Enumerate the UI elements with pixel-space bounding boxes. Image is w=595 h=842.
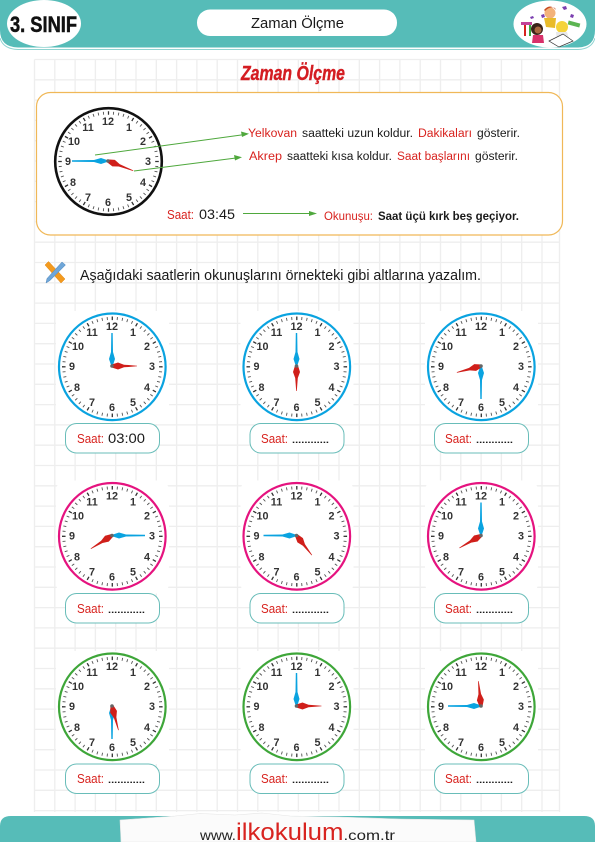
clock 4: 08:15: 10: [72, 510, 84, 522]
clock 5: 04:45: 12: [290, 490, 303, 502]
badge: children illustration: [514, 0, 586, 48]
clock 4: 08:15: 3: [149, 531, 155, 543]
clock 3: 08:30: 5: [499, 397, 505, 409]
text: example time: Saat:: [167, 208, 194, 222]
clock 4: 08:15: 2: [144, 510, 150, 522]
clock 2: 06:00: 7: [273, 397, 280, 409]
label: clock 3 time: ............: [476, 435, 513, 445]
clock 1: 03:00: 9: [69, 361, 75, 373]
clock 6: 08:00: 12: [475, 490, 487, 502]
example clock: 12: [102, 116, 114, 128]
clock 8: 03:00: 4: [328, 722, 335, 734]
clock 9: 11:45: 3: [518, 701, 524, 713]
label: clock 5 time: [250, 594, 344, 623]
example clock: 9: [65, 156, 71, 168]
clock 8: 03:00: [240, 651, 354, 764]
clock 8: 03:00: 9: [253, 701, 260, 713]
clock 7: 05:30: 11: [86, 667, 98, 679]
clock 7: 05:30: 12: [106, 661, 118, 673]
clock 4: 08:15: [56, 480, 169, 594]
label: clock 8 time: Saat:: [261, 772, 288, 786]
clock 3: 08:30: 12: [475, 321, 487, 333]
example clock: 10: [68, 136, 80, 148]
clock 5: 04:45: 5: [314, 566, 321, 578]
clock 6: 08:00: 5: [499, 566, 505, 578]
text: minute hand explanation: saatteki uzun koldur.: [302, 128, 413, 140]
clock 1: 03:00: 3: [149, 361, 155, 373]
label: clock 7 time: ............: [108, 775, 145, 785]
clock 4: 08:15: 7: [89, 566, 95, 578]
grid paper background: [34, 60, 560, 812]
label: clock 5 time: Saat:: [261, 602, 288, 616]
header band: [0, 0, 595, 50]
clock 2: 06:00: 3: [333, 361, 340, 373]
clock 9: 11:45: 2: [513, 681, 519, 693]
clock 9: 11:45: 7: [458, 737, 464, 749]
instruction text: Aşağıdaki saatlerin okunuşlarını örnekteki gibi altlarına yazalım.: [80, 268, 481, 284]
clock 6: 08:00: 4: [513, 552, 519, 564]
label: clock 4 time: ............: [108, 605, 145, 615]
label: clock 1 time: Saat:: [77, 432, 104, 446]
clock 7: 05:30: [56, 651, 169, 764]
label: clock 9 time: Saat:: [445, 772, 472, 786]
clock 5: 04:45: 9: [253, 531, 260, 543]
clock 2: 06:00: [240, 311, 354, 424]
clock 8: 03:00: 6: [293, 742, 300, 754]
text: example reading: Saat üçü kırk beş geçiyor.: [378, 209, 519, 223]
label: clock 6 time: ............: [476, 605, 513, 615]
clock 7: 05:30: 9: [69, 701, 75, 713]
clock 3: 08:30: 4: [513, 382, 519, 394]
clock 5: 04:45: 4: [328, 552, 335, 564]
clock 8: 03:00: 7: [273, 737, 280, 749]
badge: grade: [7, 0, 81, 47]
label: clock 3 time: Saat:: [445, 432, 472, 446]
clock 2: 06:00: 11: [271, 327, 282, 339]
clock 1: 03:00: 7: [89, 397, 95, 409]
label: clock 2 time: ............: [292, 435, 329, 445]
clock 9: 11:45: 1: [499, 667, 505, 679]
clock 6: 08:00: 2: [513, 510, 519, 522]
clock 9: 11:45: 11: [455, 667, 467, 679]
clock 3: 08:30: 10: [441, 341, 453, 353]
clock 2: 06:00: 6: [293, 402, 300, 414]
text: minute hand explanation: Yelkovan: [248, 128, 297, 140]
clock 2: 06:00: 1: [314, 327, 321, 339]
clock 2: 06:00: 2: [328, 341, 335, 353]
clock 9: 11:45: 10: [441, 681, 453, 693]
clock 8: 03:00: 5: [314, 737, 321, 749]
clock 1: 03:00: 1: [130, 327, 136, 339]
clock 3: 08:30: 11: [455, 327, 467, 339]
text: hour hand explanation: gösterir.: [475, 151, 518, 163]
clock 3: 08:30: 1: [499, 327, 505, 339]
header title pill: Zaman Ölçme: [251, 14, 344, 32]
clock 8: 03:00: 2: [328, 681, 335, 693]
clock 3: 08:30: 7: [458, 397, 464, 409]
clock 6: 08:00: 9: [438, 531, 444, 543]
clock 3: 08:30: 2: [513, 341, 519, 353]
label: clock 7 time: [66, 764, 160, 794]
panel: example explanation: [36, 92, 562, 235]
label: clock 9 time: ............: [476, 775, 513, 785]
clock 5: 04:45: 3: [333, 531, 340, 543]
example clock: 8: [70, 177, 76, 189]
clock 6: 08:00: 1: [499, 496, 505, 508]
torn paper: [120, 813, 476, 842]
clock 4: 08:15: 8: [74, 552, 80, 564]
clock 2: 06:00: 12: [290, 321, 303, 333]
arrow: to hour hand label: [134, 155, 242, 171]
clock 1: 03:00: 11: [86, 327, 98, 339]
example clock: 3: [145, 156, 151, 168]
clock 5: 04:45: 10: [256, 510, 269, 522]
clock 3: 08:30: 8: [443, 382, 449, 394]
clock 2: 06:00: 4: [328, 382, 335, 394]
clock 5: 04:45: 8: [258, 552, 265, 564]
clock 1: 03:00: 10: [72, 341, 84, 353]
clock 8: 03:00: 3: [333, 701, 340, 713]
example clock: 5: [126, 192, 132, 204]
clock 5: 04:45: 7: [273, 566, 280, 578]
clock 6: 08:00: 6: [478, 572, 484, 584]
clock 4: 08:15: 5: [130, 566, 136, 578]
clock 7: 05:30: 7: [89, 737, 95, 749]
clock 7: 05:30: 10: [72, 681, 84, 693]
clock 5: 04:45: [240, 480, 354, 594]
clock 3: 08:30: 3: [518, 361, 524, 373]
label: clock 6 time: [434, 594, 528, 623]
clock 1: 03:00: [56, 311, 169, 424]
clock 4: 08:15: 12: [106, 490, 118, 502]
clock 4: 08:15: 11: [86, 496, 98, 508]
example clock: 11: [82, 122, 94, 134]
label: clock 3 time: [434, 424, 528, 453]
text: minute hand explanation: Dakikaları: [418, 128, 472, 140]
text: hour hand explanation: Saat başlarını: [397, 151, 470, 163]
example clock: 6: [105, 197, 111, 209]
clock 7: 05:30: 8: [74, 722, 80, 734]
clock 5: 04:45: 11: [271, 496, 282, 508]
clock 7: 05:30: 2: [144, 681, 150, 693]
clock 7: 05:30: 3: [149, 701, 155, 713]
text: hour hand explanation: saatteki kısa koldur.: [287, 151, 392, 163]
clock 6: 08:00: 10: [441, 510, 453, 522]
clock 3: 08:30: [425, 311, 538, 424]
label: clock 6 time: Saat:: [445, 602, 472, 616]
clock 1: 03:00: 2: [144, 341, 150, 353]
clock 2: 06:00: 9: [253, 361, 260, 373]
clock 7: 05:30: 1: [130, 667, 136, 679]
clock 7: 05:30: 6: [109, 742, 115, 754]
clock 2: 06:00: 8: [258, 382, 265, 394]
clock 8: 03:00: 11: [271, 667, 282, 679]
text: example time: 03:45: [199, 207, 235, 222]
text: hour hand explanation: Akrep: [249, 151, 282, 163]
clock 9: 11:45: 9: [438, 701, 444, 713]
clock 9: 11:45: 4: [513, 722, 519, 734]
label: clock 2 time: [250, 424, 344, 453]
label: clock 8 time: ............: [292, 775, 329, 785]
footer band: [0, 813, 595, 842]
clock 6: 08:00: 8: [443, 552, 449, 564]
clock 9: 11:45: 12: [475, 661, 487, 673]
clock 4: 08:15: 6: [109, 572, 115, 584]
clock 4: 08:15: 9: [69, 531, 75, 543]
clock 1: 03:00: 8: [74, 382, 80, 394]
example clock: 4: [140, 177, 146, 189]
label: clock 1 time: [66, 424, 160, 453]
label: clock 2 time: Saat:: [261, 432, 288, 446]
clock 7: 05:30: 5: [130, 737, 136, 749]
clock 1: 03:00: 5: [130, 397, 136, 409]
example clock: 2: [140, 136, 146, 148]
clock 4: 08:15: 1: [130, 496, 136, 508]
label: clock 1 time: 03:00: [108, 430, 145, 446]
example clock: [55, 108, 162, 215]
arrow: time to reading: [243, 211, 317, 216]
clock 2: 06:00: 5: [314, 397, 321, 409]
clock 8: 03:00: 10: [256, 681, 269, 693]
text: example reading: Okunuşu:: [324, 209, 373, 223]
arrow: to minute hand label: [95, 132, 249, 155]
clock 7: 05:30: 4: [144, 722, 150, 734]
label: clock 4 time: Saat:: [77, 602, 104, 616]
clock 3: 08:30: 9: [438, 361, 444, 373]
clock 8: 03:00: 12: [290, 661, 303, 673]
clock 4: 08:15: 4: [144, 552, 150, 564]
clock 8: 03:00: 1: [314, 667, 321, 679]
clock 6: 08:00: [425, 480, 538, 594]
icon: pencil and ruler: [45, 262, 66, 283]
label: clock 9 time: [434, 764, 528, 794]
header title pill: [197, 10, 397, 36]
text: minute hand explanation: gösterir.: [477, 128, 520, 140]
clock 6: 08:00: 3: [518, 531, 524, 543]
badge: grade: 3. SINIF: [10, 12, 77, 37]
clock 6: 08:00: 11: [455, 496, 467, 508]
clock 9: 11:45: [425, 651, 538, 764]
label: clock 4 time: [66, 594, 160, 623]
label: clock 5 time: ............: [292, 605, 329, 615]
clock 1: 03:00: 12: [106, 321, 118, 333]
clock 9: 11:45: 6: [478, 742, 484, 754]
clock 1: 03:00: 4: [144, 382, 150, 394]
clock 5: 04:45: 6: [293, 572, 300, 584]
clock 9: 11:45: 5: [499, 737, 505, 749]
clock 9: 11:45: 8: [443, 722, 449, 734]
clock 6: 08:00: 7: [458, 566, 464, 578]
label: clock 8 time: [250, 764, 344, 794]
clock 2: 06:00: 10: [256, 341, 269, 353]
clock 3: 08:30: 6: [478, 402, 484, 414]
clock 1: 03:00: 6: [109, 402, 115, 414]
clock 5: 04:45: 2: [328, 510, 335, 522]
clock 8: 03:00: 8: [258, 722, 265, 734]
page title: Zaman Ölçme: [240, 62, 345, 85]
example clock: 7: [85, 192, 91, 204]
example clock: 1: [126, 122, 132, 134]
label: clock 7 time: Saat:: [77, 772, 104, 786]
clock 5: 04:45: 1: [314, 496, 321, 508]
